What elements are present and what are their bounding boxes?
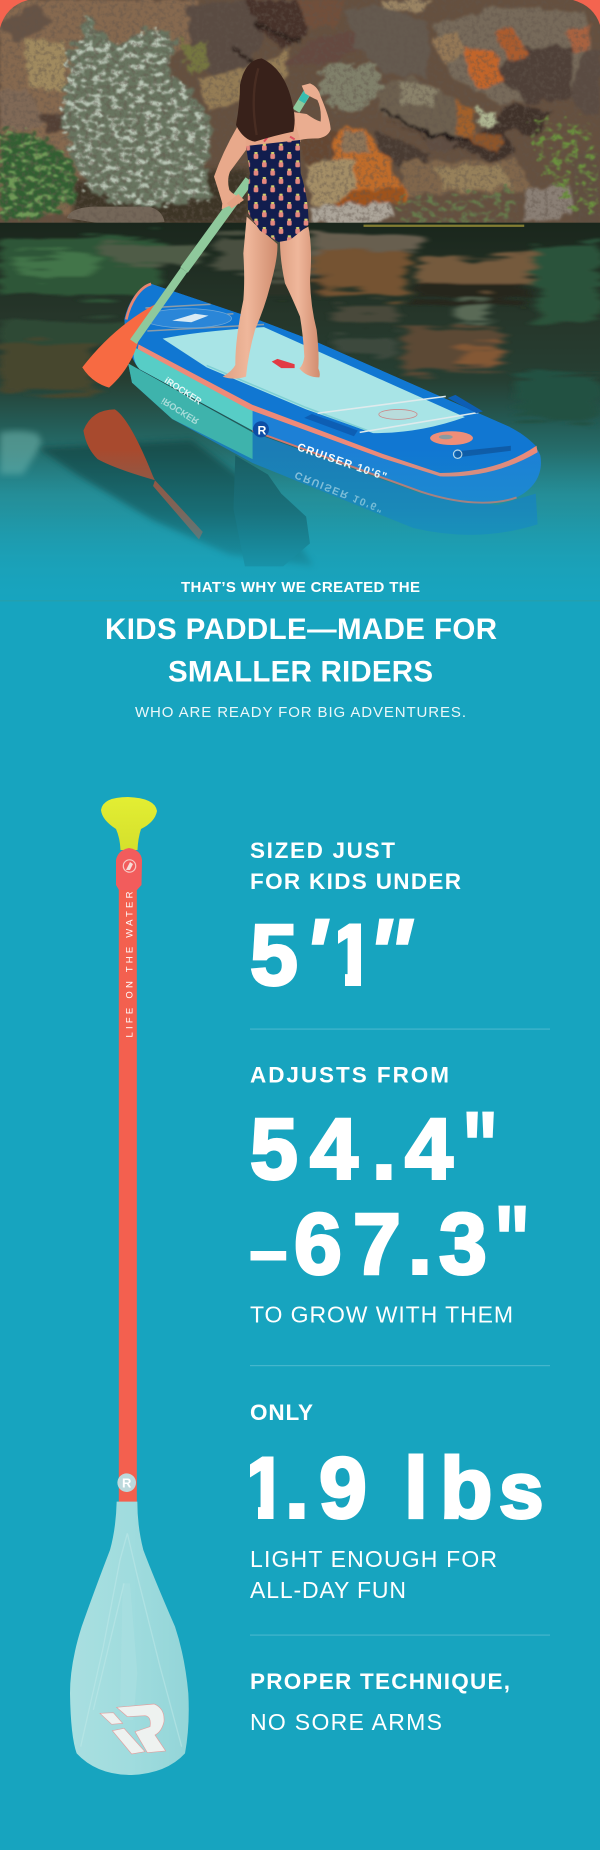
main title: KIDS PADDLE—MADE FOR xyxy=(105,613,497,646)
hair xyxy=(236,58,295,142)
stat label: PROPER TECHNIQUE, xyxy=(250,1669,510,1694)
silver bush xyxy=(63,11,212,207)
board text: CRUISER 10'6" xyxy=(296,441,388,483)
swimsuit xyxy=(246,140,309,242)
stat note: NO SORE ARMS xyxy=(250,1709,442,1735)
stat label: ADJUSTS FROM xyxy=(250,1062,449,1088)
main title: SMALLER RIDERS xyxy=(168,656,433,688)
girl reflection xyxy=(233,455,310,566)
stat value xyxy=(250,1091,530,1295)
hero photo: girl paddling on a board xyxy=(0,0,600,602)
paddle blade xyxy=(82,303,158,388)
stat label: SIZED JUST xyxy=(250,838,395,863)
stat value: 54.4 xyxy=(250,1102,453,1198)
paddle shaft xyxy=(119,885,137,1502)
stat value: .9 xyxy=(285,1440,367,1536)
paddle collar xyxy=(116,848,142,890)
photo fade into teal xyxy=(0,450,600,600)
stat value: 67.3 xyxy=(294,1196,487,1292)
subtitle: WHO ARE READY FOR BIG ADVENTURES. xyxy=(135,704,466,721)
stat value xyxy=(250,918,414,987)
rear bungee and straps xyxy=(318,396,478,432)
stat value: ' xyxy=(303,898,329,1008)
back xyxy=(245,117,301,147)
deck pad xyxy=(163,327,465,433)
collar logo xyxy=(123,860,136,872)
stat label: ONLY xyxy=(250,1400,313,1425)
board logo xyxy=(253,421,269,437)
stat value: s xyxy=(499,1446,544,1534)
rock wall xyxy=(0,0,600,230)
paddle shaft xyxy=(133,92,307,342)
legs xyxy=(223,217,320,379)
board reflection: iROCKER xyxy=(160,395,201,426)
stat value: lb xyxy=(404,1440,493,1536)
stat: sized for kids xyxy=(250,842,460,987)
eyebrow: THAT’S WHY WE CREATED THE xyxy=(181,579,420,596)
stat note: ALL-DAY FUN xyxy=(250,1577,406,1603)
coral corners xyxy=(0,0,600,28)
green shrubs right xyxy=(398,119,600,226)
paddle blade xyxy=(70,1502,189,1775)
heading block xyxy=(105,579,497,721)
blade logo xyxy=(100,1704,166,1754)
paddle reflection xyxy=(83,409,203,540)
water xyxy=(0,223,600,602)
stat value: 1 xyxy=(329,908,377,1004)
stat value: " xyxy=(366,898,414,1008)
flat rock at waterline xyxy=(67,207,165,226)
paddle illustration xyxy=(70,797,189,1775)
right arm xyxy=(290,83,331,140)
nose bungee xyxy=(145,304,264,331)
stat label xyxy=(250,838,461,894)
shaft lettering: LIFE ON THE WATER xyxy=(124,891,136,1038)
stat note xyxy=(250,1546,497,1603)
stat note: TO GROW WITH THEM xyxy=(250,1302,513,1328)
stat value: " xyxy=(462,1091,498,1201)
green shrub left xyxy=(0,130,77,218)
paddle board: R xyxy=(258,424,267,438)
stat value: 5 xyxy=(250,908,298,1004)
paddle grip xyxy=(101,797,157,850)
hand on shaft xyxy=(227,194,244,208)
shaft medallion xyxy=(117,1473,136,1492)
paddle board: iROCKER xyxy=(163,375,204,407)
left arm xyxy=(214,123,246,209)
main title xyxy=(105,613,497,688)
paddle board xyxy=(124,284,541,503)
board reflection: CRUISER 10'6" xyxy=(294,469,385,514)
stat: technique xyxy=(250,1669,510,1735)
stat label: FOR KIDS UNDER xyxy=(250,869,461,894)
stat value: " xyxy=(494,1185,530,1295)
stat: weight xyxy=(242,1400,544,1603)
board reflection xyxy=(128,364,538,535)
dark bank shadow xyxy=(73,168,249,224)
red tab xyxy=(272,359,295,368)
stat value: 1 xyxy=(242,1440,290,1536)
stat note: LIGHT ENOUGH FOR xyxy=(250,1546,497,1572)
stat value xyxy=(250,1454,542,1520)
shaft medallion: R xyxy=(122,1476,132,1490)
girl with paddle shaft xyxy=(133,58,331,379)
stat value: – xyxy=(250,1214,287,1288)
stat: adjustable length xyxy=(250,1062,530,1328)
